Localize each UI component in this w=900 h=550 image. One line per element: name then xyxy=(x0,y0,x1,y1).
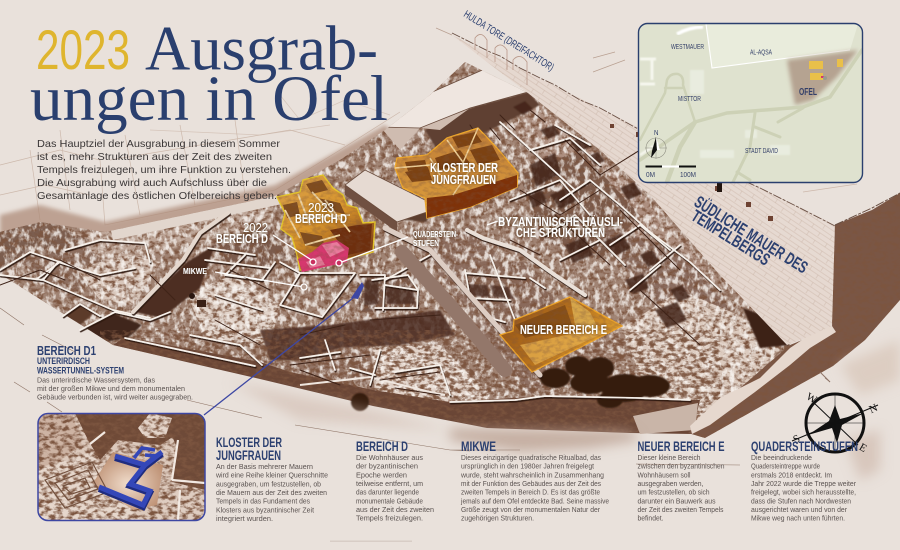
inset: water tunnel system xyxy=(38,413,205,521)
blue tunnel structure xyxy=(99,448,162,507)
block: Bereich D: monumentale Gebäude xyxy=(356,496,423,505)
block: Quadersteinstufen: Die beeindruckende xyxy=(751,453,812,462)
block: Bereich D1: Gebäude verbunden ist, wird weiter ausgegraben. xyxy=(37,392,193,402)
illustration: excavation site xyxy=(0,60,800,440)
block: Bereich D1 xyxy=(37,343,193,402)
block: Kloster der Jungfrauen: ausgegraben, um festzustellen, ob xyxy=(216,479,321,488)
label: Bereich D 2022: BEREICH D xyxy=(216,231,268,246)
block: Quadersteinstufen: erstmals 2018 entdeckt. Im xyxy=(751,470,832,479)
block: Neuer Bereich E xyxy=(638,438,724,523)
block: Neuer Bereich E: um festzustellen, ob sich xyxy=(638,488,710,497)
compass rose xyxy=(791,391,880,455)
map labels: AL-AQSA xyxy=(750,50,772,56)
label: Kloster der: KLOSTER DER xyxy=(430,160,498,175)
block: Mikwe xyxy=(460,438,609,523)
map labels xyxy=(646,44,817,179)
map contents xyxy=(640,24,862,182)
sketch lines on the ground xyxy=(0,308,830,465)
block: Mikwe: mit der Funktion des Gebäudes aus der Zeit des xyxy=(461,479,601,488)
block: Bereich D: Epoche werden xyxy=(356,470,407,479)
area: Neuer Bereich E xyxy=(498,295,624,375)
site tonal shapes xyxy=(0,105,780,432)
label: Bereich D 2023 second line: BEREICH D xyxy=(295,211,347,226)
label: 2023 Bereich D: 2023 xyxy=(308,200,334,215)
label: Byzantinische: BYZANTINISCHE HÄUSLI- xyxy=(498,214,623,229)
block: Kloster der Jungfrauen: wird eine Reihe kleiner Querschnitte xyxy=(215,471,328,480)
block: Quadersteinstufen: dass die Stufen nach Nordwesten xyxy=(751,496,851,505)
walls and structures line work xyxy=(0,110,720,402)
wall label: Hulda Tore: HULDA TORE (DREIFACHTOR) xyxy=(461,8,556,74)
intro text: Das Hauptziel der Ausgrabung in diesem Sommer xyxy=(37,138,281,150)
block: Mikwe: zugehörigen Strukturen. xyxy=(461,514,534,523)
compass rose: E xyxy=(857,441,869,455)
label: Stufen: STUFEN xyxy=(413,238,439,248)
block: Bereich D1: BEREICH D1 xyxy=(37,343,96,358)
label: Mikwe: MIKWE xyxy=(183,266,207,276)
block: Mikwe: Dieses einzigartige quadratische Ritualbad, das xyxy=(461,453,601,462)
block: Neuer Bereich E: befindet. xyxy=(638,514,664,523)
label: Neuer Bereich E: NEUER BEREICH E xyxy=(520,322,607,337)
pale roof and terrace blocks xyxy=(110,68,528,240)
intro text: ist es, mehr Strukturen aus der Zeit des zweiten xyxy=(37,151,272,163)
block: Kloster der Jungfrauen xyxy=(215,434,328,523)
block: Mikwe: Größe zeugt von der monumentalen Natur der xyxy=(461,505,600,514)
block: Bereich D: BEREICH D xyxy=(356,438,408,454)
block: Quadersteinstufen: ausgerichtet waren und von der xyxy=(751,505,847,514)
block: Mikwe: MIKWE xyxy=(461,438,496,454)
block: Kloster der Jungfrauen: Tempels in das Fundament des xyxy=(216,497,310,506)
block: Neuer Bereich E: Wohnhäusern soll xyxy=(638,470,691,479)
map labels: 100M xyxy=(680,172,696,179)
intro text: Tempels freizulegen, um ihre Funktion zu verstehen. xyxy=(37,164,291,176)
intro text: Gesamtanlage des östlichen Ofelbereichs geben. xyxy=(37,190,277,202)
wall label: Südliche Mauer des Tempelbergs: SÜDLICHE MAUER DES xyxy=(691,192,811,277)
block: Neuer Bereich E: NEUER BEREICH E xyxy=(638,438,724,454)
rooms xyxy=(405,132,500,182)
block: Bereich D: aus der Zeit des zweiten xyxy=(356,505,434,514)
intro text: Die Ausgrabung wird auch Aufschluss über die xyxy=(37,177,267,189)
dark ink strokes xyxy=(0,110,700,395)
site labels xyxy=(183,160,623,337)
block: Neuer Bereich E: der Zeit des zweiten Tempels xyxy=(638,505,724,514)
washes below the site xyxy=(230,340,900,480)
map labels: STADT DAVID xyxy=(745,148,778,155)
block: Mikwe: jemals auf dem Ofel entdeckte Bad. Seine massive xyxy=(460,496,609,505)
wash behind upper-left terrace xyxy=(0,125,395,245)
map labels: OFEL xyxy=(799,87,817,98)
pink 2022 zone xyxy=(298,240,349,272)
map labels: MISTTOR xyxy=(678,96,701,103)
block: Bereich D: der byzantinischen xyxy=(356,462,418,471)
corner tower and curved wall xyxy=(680,190,900,440)
compass rose: W xyxy=(804,391,820,407)
block: Kloster der Jungfrauen: JUNGFRAUEN xyxy=(216,447,281,463)
block: Kloster der Jungfrauen: An der Basis mehrerer Mauern xyxy=(216,462,313,471)
title: 2023 xyxy=(36,18,130,81)
blue leader line to tunnel xyxy=(204,282,364,415)
block: Quadersteinstufen: Mikwe weg nach unten führten. xyxy=(751,514,845,523)
block: Bereich D1: UNTERIRDISCH xyxy=(37,356,90,367)
front face xyxy=(427,175,517,218)
bottom retaining wall band xyxy=(113,337,700,434)
block: Kloster der Jungfrauen: Klosters aus byzantinischer Zeit xyxy=(216,505,315,514)
pale walls of Bereich D xyxy=(285,192,350,245)
block: Bereich D xyxy=(356,438,434,523)
block: Bereich D1: mit der großen Mikwe und dem monumentalen xyxy=(37,384,185,393)
label: 2022: 2022 xyxy=(243,220,268,235)
block: Bereich D: teilweise entfernt, um xyxy=(356,479,423,488)
locator map xyxy=(638,24,862,182)
map labels: WESTMAUER xyxy=(671,44,704,51)
area: Kloster der Jungfrauen xyxy=(390,125,520,220)
compass rose: N xyxy=(867,402,880,416)
dark bushes xyxy=(351,356,670,411)
map scale bar xyxy=(646,166,696,168)
label: häusliche Strukturen: CHE STRUKTUREN xyxy=(516,225,605,240)
block: Mikwe: zweiten Tempels in Bereich D. Es ist das größte xyxy=(461,488,600,497)
block: Neuer Bereich E: zwischen den byzantinischen xyxy=(638,462,724,471)
block: Bereich D1: Das unterirdische Wassersystem, das xyxy=(37,376,155,384)
connector lines with markers xyxy=(215,221,498,290)
label: Quadersteinstufen: QUADERSTEIN- xyxy=(413,229,458,239)
block: Bereich D1: WASSERTUNNEL-SYSTEM xyxy=(37,366,124,376)
dark pits and shadows xyxy=(63,92,790,360)
block: Quadersteinstufen: Jahr 2022 wurde die Treppe weiter xyxy=(751,479,856,488)
roads xyxy=(640,50,862,182)
south wall of the temple mount xyxy=(452,33,835,345)
intro text xyxy=(37,138,291,202)
wall label: Südliche Mauer des Tempelbergs: TEMPELBERGS xyxy=(688,206,773,270)
block: Neuer Bereich E: ausgegraben werden, xyxy=(638,479,704,488)
area: Bereich D 2023 xyxy=(276,174,376,272)
block: Bereich D: Die Wohnhäuser aus xyxy=(356,453,423,462)
block: Kloster der Jungfrauen: integriert wurden. xyxy=(216,514,273,523)
map labels: 0M xyxy=(646,172,655,179)
block: Neuer Bereich E: darunter ein Bauwerk aus xyxy=(638,496,716,505)
inset scene xyxy=(38,413,205,521)
block: Quadersteinstufen xyxy=(751,438,858,523)
block: Mikwe: wurde, steht wahrscheinlich in Zusammenhang xyxy=(460,470,604,479)
sketched faint plan lines xyxy=(0,28,857,225)
block: Bereich D: Tempels freizulegen. xyxy=(356,514,423,523)
site ink texture xyxy=(0,60,800,440)
block: Mikwe: ursprünglich in den 1980er Jahren freigelegt xyxy=(461,462,595,471)
title: ungen in Ofel xyxy=(30,63,388,135)
block: Quadersteinstufen: Quadersteintreppe wurde xyxy=(751,462,820,471)
rooms in Bereich D xyxy=(283,180,372,255)
excavation areas on map xyxy=(809,59,843,80)
site base tone xyxy=(0,62,790,432)
title: Ausgrab- xyxy=(145,14,378,84)
label: Jungfrauen: JUNGFRAUEN xyxy=(431,172,496,187)
block: Kloster der Jungfrauen: KLOSTER DER xyxy=(216,434,282,450)
pale diagonal paths xyxy=(133,213,228,312)
map labels: N xyxy=(654,130,658,137)
title xyxy=(30,14,388,135)
pale stone walls xyxy=(0,122,720,402)
compass rose: S xyxy=(791,433,802,446)
map compass xyxy=(645,137,667,159)
block: Bereich D: das darunter liegende xyxy=(356,488,419,497)
block: Kloster der Jungfrauen: die Mauern aus der Zeit des zweiten xyxy=(216,488,327,497)
site highlight texture xyxy=(0,60,800,440)
block: Neuer Bereich E: Dieser kleine Bereich xyxy=(638,453,700,462)
block: Quadersteinstufen: freigelegt, wobei sich herausstellte, xyxy=(751,488,856,497)
Ofel area xyxy=(787,50,858,105)
